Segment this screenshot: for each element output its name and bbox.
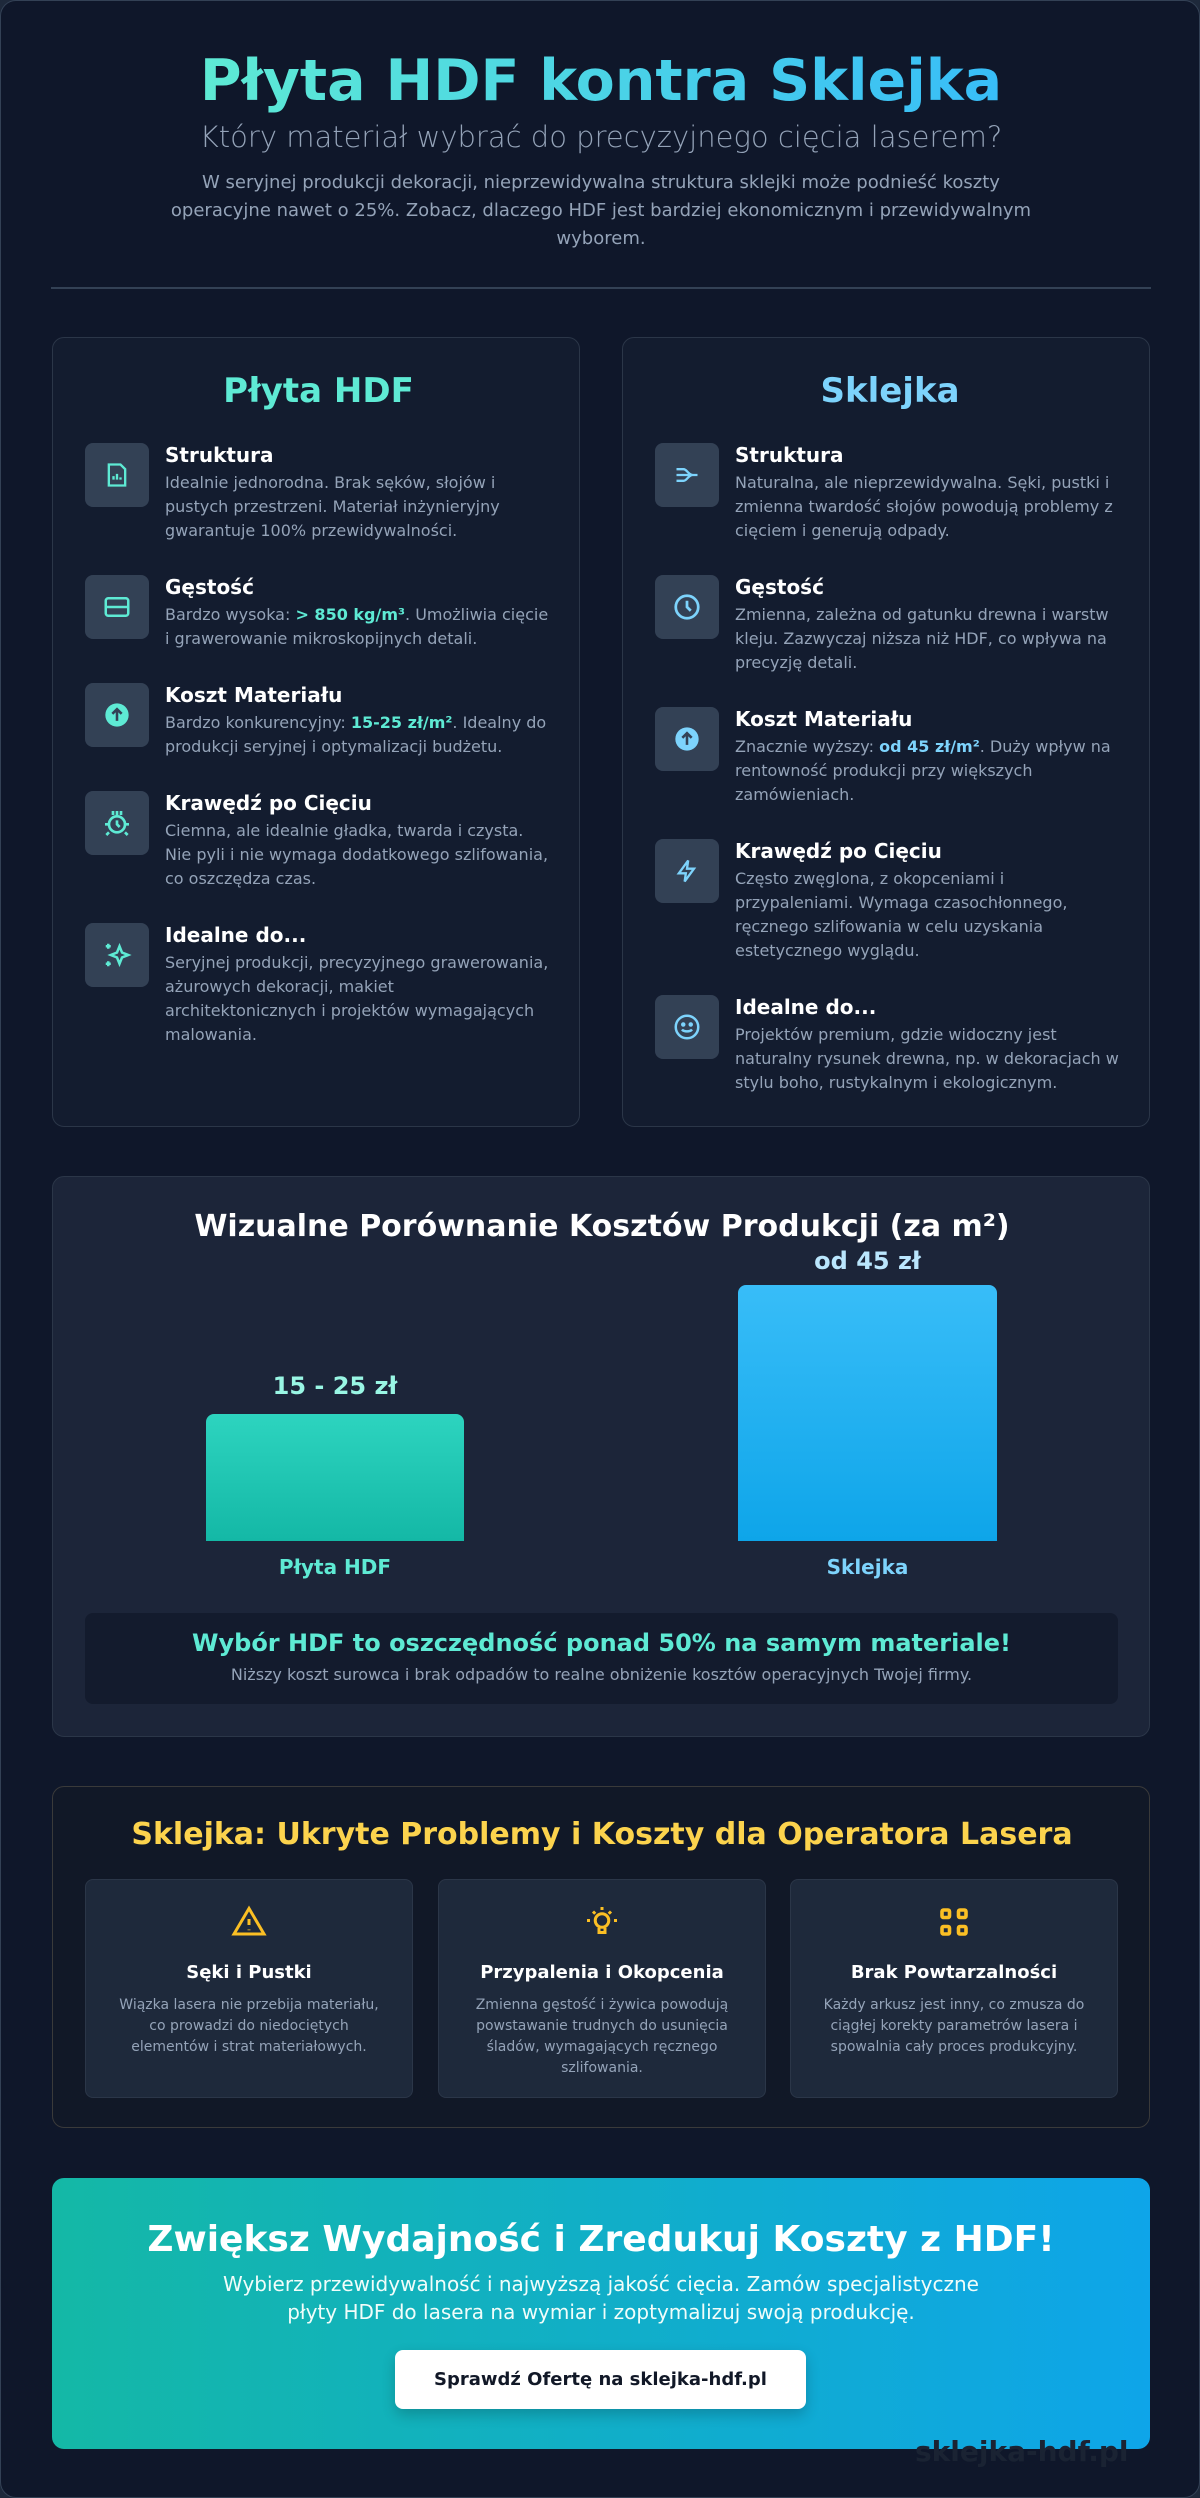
panel: CTA (52, 2178, 1150, 2449)
callout: savings (85, 1613, 1118, 1704)
item: gestosc: Gęstość (735, 575, 824, 599)
item: krawedz: przypaleniami. Wymaga czasochłonnego, (735, 893, 1067, 912)
bar label: Sklejka: Sklejka (827, 1555, 908, 1579)
panel: chart (52, 1176, 1150, 1737)
bar label: HDF: Płyta HDF (279, 1555, 391, 1579)
item: struktura (655, 443, 1113, 540)
problem card: powtarzalnosc (790, 1879, 1118, 2098)
item: idealne do: Seryjnej produkcji, precyzyjnego grawerowania, ażurowych dekoracji, makiet (165, 953, 548, 996)
item: krawedz: Ciemna, ale idealnie gładka, twarda i czysta. (165, 821, 523, 840)
item: koszt: Koszt Materiału (165, 683, 342, 707)
bar: HDF (206, 1414, 464, 1541)
item: idealne do (85, 923, 548, 1044)
panel: Sklejka (622, 337, 1150, 1127)
item: idealne do: stylu boho, rustykalnym i ekologicznym. (735, 1073, 1057, 1092)
problem card: przypalenia: Zmienna gęstość i żywica powodują powstawanie trudnych do usunięcia śladów, wymagających ręcznego szlifowania. (476, 1997, 728, 2076)
item: struktura (85, 443, 500, 540)
item: krawedz: Często zwęglona, z okopceniami i (735, 869, 1004, 888)
CTA heading: Zwiększ Wydajność i Zredukuj Koszty z HDF! (147, 2219, 1055, 2260)
item: koszt (655, 707, 1111, 804)
callout: savings: Niższy koszt surowca i brak odpadów to realne obniżenie kosztów operacyjnych Twojej firmy. (231, 1665, 972, 1684)
item: koszt (85, 683, 546, 756)
item: krawedz (85, 791, 548, 888)
item: krawedz: Krawędź po Cięciu (735, 839, 942, 863)
item: struktura: Idealnie jednorodna. Brak sęków, słojów i pustych przestrzeni. Materiał inżynieryjny gwarantuje 100% przewidywalności. (165, 473, 500, 540)
item: idealne do: Idealne do... (735, 995, 876, 1019)
item: krawedz: estetycznego wyglądu. (735, 941, 920, 960)
item: idealne do: Projektów premium, gdzie widoczny jest (735, 1025, 1057, 1044)
item: koszt: Koszt Materiału (735, 707, 912, 731)
bar chart (206, 1247, 997, 1579)
intro paragraph: W seryjnej produkcji dekoracji, nieprzewidywalna struktura sklejki może podnieść koszty operacyjne nawet o 25%. Zobacz, dlaczego HDF jest bardziej ekonomicznym i przewidywalnym wyborem. (171, 172, 1031, 249)
bar: Sklejka (738, 1285, 997, 1541)
title: Płyta HDF kontra Sklejka (200, 48, 1002, 114)
item: struktura: Struktura (735, 443, 844, 467)
problem card: przypalenia (438, 1879, 766, 2098)
item: gestosc (655, 575, 1109, 672)
item: gestosc: Bardzo wysoka: > 850 kg/m³. Umożliwia cięcie i grawerowanie mikroskopijnych detali. (165, 605, 548, 648)
CTA button: Sprawdź Ofertę na sklejka-hdf.pl (434, 2369, 767, 2390)
icon: warning (231, 1906, 266, 1936)
watermark: sklejka-hdf.pl (915, 2435, 1129, 2468)
problem card: powtarzalnosc: ciągłej korekty parametrów lasera i (830, 2018, 1078, 2034)
item: idealne do: Idealne do... (165, 923, 306, 947)
problem card: seki (85, 1879, 413, 2098)
problem card: seki: co prowadzi do niedociętych (149, 2018, 349, 2034)
problem card: seki: Sęki i Pustki (186, 1962, 312, 1983)
item: struktura: Struktura (165, 443, 274, 467)
item: idealne do (655, 995, 1119, 1092)
problem card: powtarzalnosc: spowalnia cały proces produkcyjny. (831, 2039, 1077, 2055)
heading: problems: Sklejka: Ukryte Problemy i Koszty dla Operatora Lasera (131, 1817, 1073, 1852)
item: gestosc: Gęstość (165, 575, 254, 599)
item: koszt: Bardzo konkurencyjny: 15-25 zł/m². Idealny do produkcji seryjnej i optymalizacji budżetu. (165, 713, 546, 756)
problem card: seki: Wiązka lasera nie przebija materiału, (119, 1997, 379, 2013)
heading: Płyta HDF: Płyta HDF (223, 371, 414, 411)
callout: savings: Wybór HDF to oszczędność ponad 50% na samym materiale! (192, 1629, 1011, 1657)
item: struktura: Naturalna, ale nieprzewidywalna. Sęki, pustki i zmienna twardość słojów powodują problemy z cięciem i generują odpady. (735, 473, 1113, 540)
chart title: Wizualne Porównanie Kosztów Produkcji (za m²) (194, 1209, 1010, 1244)
item: gestosc (85, 575, 548, 648)
problem card: przypalenia: Przypalenia i Okopcenia (480, 1962, 724, 1983)
icon: bulb (587, 1907, 617, 1934)
problem card: powtarzalnosc: Każdy arkusz jest inny, co zmusza do (824, 1997, 1084, 2013)
item: krawedz: Nie pyli i nie wymaga dodatkowego szlifowania, co oszczędza czas. (165, 845, 548, 888)
problem card: seki: elementów i strat materiałowych. (131, 2039, 367, 2055)
item: krawedz (655, 839, 1067, 960)
problem card: powtarzalnosc: Brak Powtarzalności (851, 1962, 1057, 1983)
heading: Sklejka: Sklejka (820, 371, 960, 411)
item: gestosc: Zmienna, zależna od gatunku drewna i warstw kleju. Zazwyczaj niższa niż HDF, co wpływa na precyzję detali. (735, 605, 1109, 672)
CTA text: Wybierz przewidywalność i najwyższą jakość cięcia. Zamów specjalistyczne płyty HDF do lasera na wymiar i zoptymalizuj swoją produkcję. (223, 2272, 979, 2324)
item: idealne do: naturalny rysunek drewna, np. w dekoracjach w (735, 1049, 1119, 1068)
panel: hidden problems (52, 1786, 1150, 2128)
item: koszt: Znacznie wyższy: od 45 zł/m². Duży wpływ na rentowność produkcji przy większych zamówieniach. (735, 737, 1111, 804)
subtitle: Który materiał wybrać do precyzyjnego cięcia laserem? (200, 120, 1002, 154)
CTA button (395, 2350, 806, 2409)
item: idealne do: architektonicznych i projektów wymagających malowania. (165, 1001, 534, 1044)
bar label: Sklejka value: od 45 zł (814, 1247, 921, 1275)
item: krawedz: Krawędź po Cięciu (165, 791, 372, 815)
panel: HDF (52, 337, 580, 1127)
bar label: HDF value: 15 - 25 zł (273, 1372, 397, 1400)
icon: grid (940, 1908, 968, 1936)
item: krawedz: ręcznego szlifowania w celu uzyskania (735, 917, 1043, 936)
